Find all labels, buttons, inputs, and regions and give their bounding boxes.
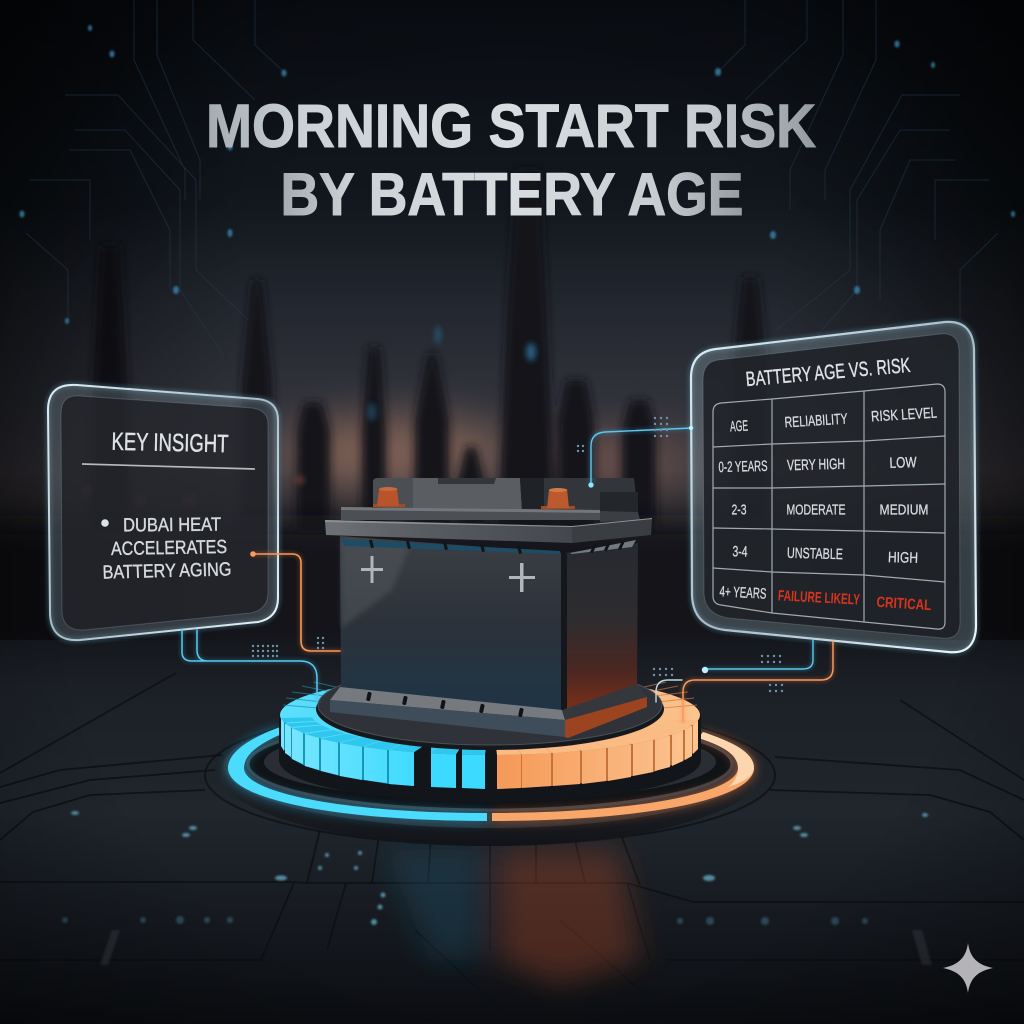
table outer glow <box>691 322 976 652</box>
battery lid main <box>325 507 652 543</box>
table row 4+ years <box>719 583 932 614</box>
key insight text: DUBAI HEAT <box>123 515 221 536</box>
battery <box>325 478 652 738</box>
platform with glowing ring and segment blocks <box>222 665 758 846</box>
platform reflection <box>385 850 640 985</box>
panel: key insight <box>48 385 278 640</box>
orange blocks <box>496 719 698 789</box>
key insight glass frame <box>48 385 278 640</box>
table row 0-2 years: VERY HIGH <box>787 456 845 474</box>
terminal right <box>541 488 575 509</box>
battery lid upper <box>373 478 638 515</box>
left orange connector <box>250 551 340 651</box>
table header row: RISK LEVEL <box>871 404 938 425</box>
right lower orange connector <box>683 642 833 722</box>
table row 4+ years: FAILURE LIKELY <box>778 587 860 609</box>
key insight text <box>102 515 232 584</box>
battery vents under lid <box>342 539 636 554</box>
key insight heading: KEY INSIGHT <box>111 428 229 458</box>
battery front face <box>340 536 564 712</box>
table header row: RELIABILITY <box>784 411 848 431</box>
key insight inner panel <box>61 396 268 630</box>
panel: battery age vs risk table <box>691 322 976 652</box>
dark gaps between front blocks <box>414 742 497 758</box>
table inner panel <box>703 334 960 638</box>
connector lines <box>182 426 833 722</box>
table row 3-4 <box>732 543 918 567</box>
circular platform bed <box>205 705 775 845</box>
key insight divider <box>82 464 255 469</box>
table row 2-3: MODERATE <box>786 502 846 518</box>
table row 4+ years: 4+ YEARS <box>719 583 767 603</box>
table grid <box>713 384 945 629</box>
floor traces <box>0 673 1024 1024</box>
table header row <box>730 404 938 435</box>
terminal left <box>373 487 405 507</box>
ring pedestal side <box>279 715 701 802</box>
table row 3-4: UNSTABLE <box>787 545 843 563</box>
key insight outer glow <box>48 385 278 640</box>
table row 2-3: 2-3 <box>732 502 746 518</box>
data dot clusters <box>252 417 783 692</box>
right top blue connector <box>588 426 693 488</box>
table row 0-2 years: 0-2 YEARS <box>718 458 768 476</box>
table glass frame <box>691 322 976 652</box>
table row 2-3: MEDIUM <box>880 502 928 518</box>
right lower blue connector <box>656 640 813 702</box>
battery base <box>330 684 647 738</box>
glow ring: orange side <box>492 732 754 821</box>
plus mark right <box>509 563 535 592</box>
table row 4+ years: CRITICAL <box>876 594 932 614</box>
key insight text: ACCELERATES <box>111 537 227 560</box>
table heading: BATTERY AGE VS. RISK <box>745 354 911 391</box>
glow ring: blue side <box>228 727 487 821</box>
key insight text: BATTERY AGING <box>102 559 232 584</box>
plus mark left <box>361 556 383 583</box>
title line 2: BY BATTERY AGE <box>280 161 744 228</box>
battery right face <box>564 543 638 712</box>
table row 2-3 <box>732 502 928 518</box>
table row 3-4: HIGH <box>888 549 918 567</box>
key insight bullet <box>101 519 109 527</box>
blue blocks <box>281 717 486 789</box>
inner disc under battery <box>316 665 664 750</box>
faint circuit lines in the sky <box>20 0 1015 353</box>
title <box>206 92 816 228</box>
table header row: AGE <box>730 418 748 435</box>
icon: sparkle watermark <box>943 943 993 993</box>
table row 3-4: 3-4 <box>732 543 748 561</box>
battery front highlight <box>341 538 410 628</box>
left blue connectors <box>182 630 317 702</box>
table row 0-2 years: LOW <box>889 454 917 472</box>
floor light dots <box>71 811 928 925</box>
segmented top annulus <box>280 675 700 755</box>
platform base <box>222 704 758 846</box>
title line 1: MORNING START RISK <box>206 92 816 160</box>
table row 0-2 years <box>718 454 917 476</box>
